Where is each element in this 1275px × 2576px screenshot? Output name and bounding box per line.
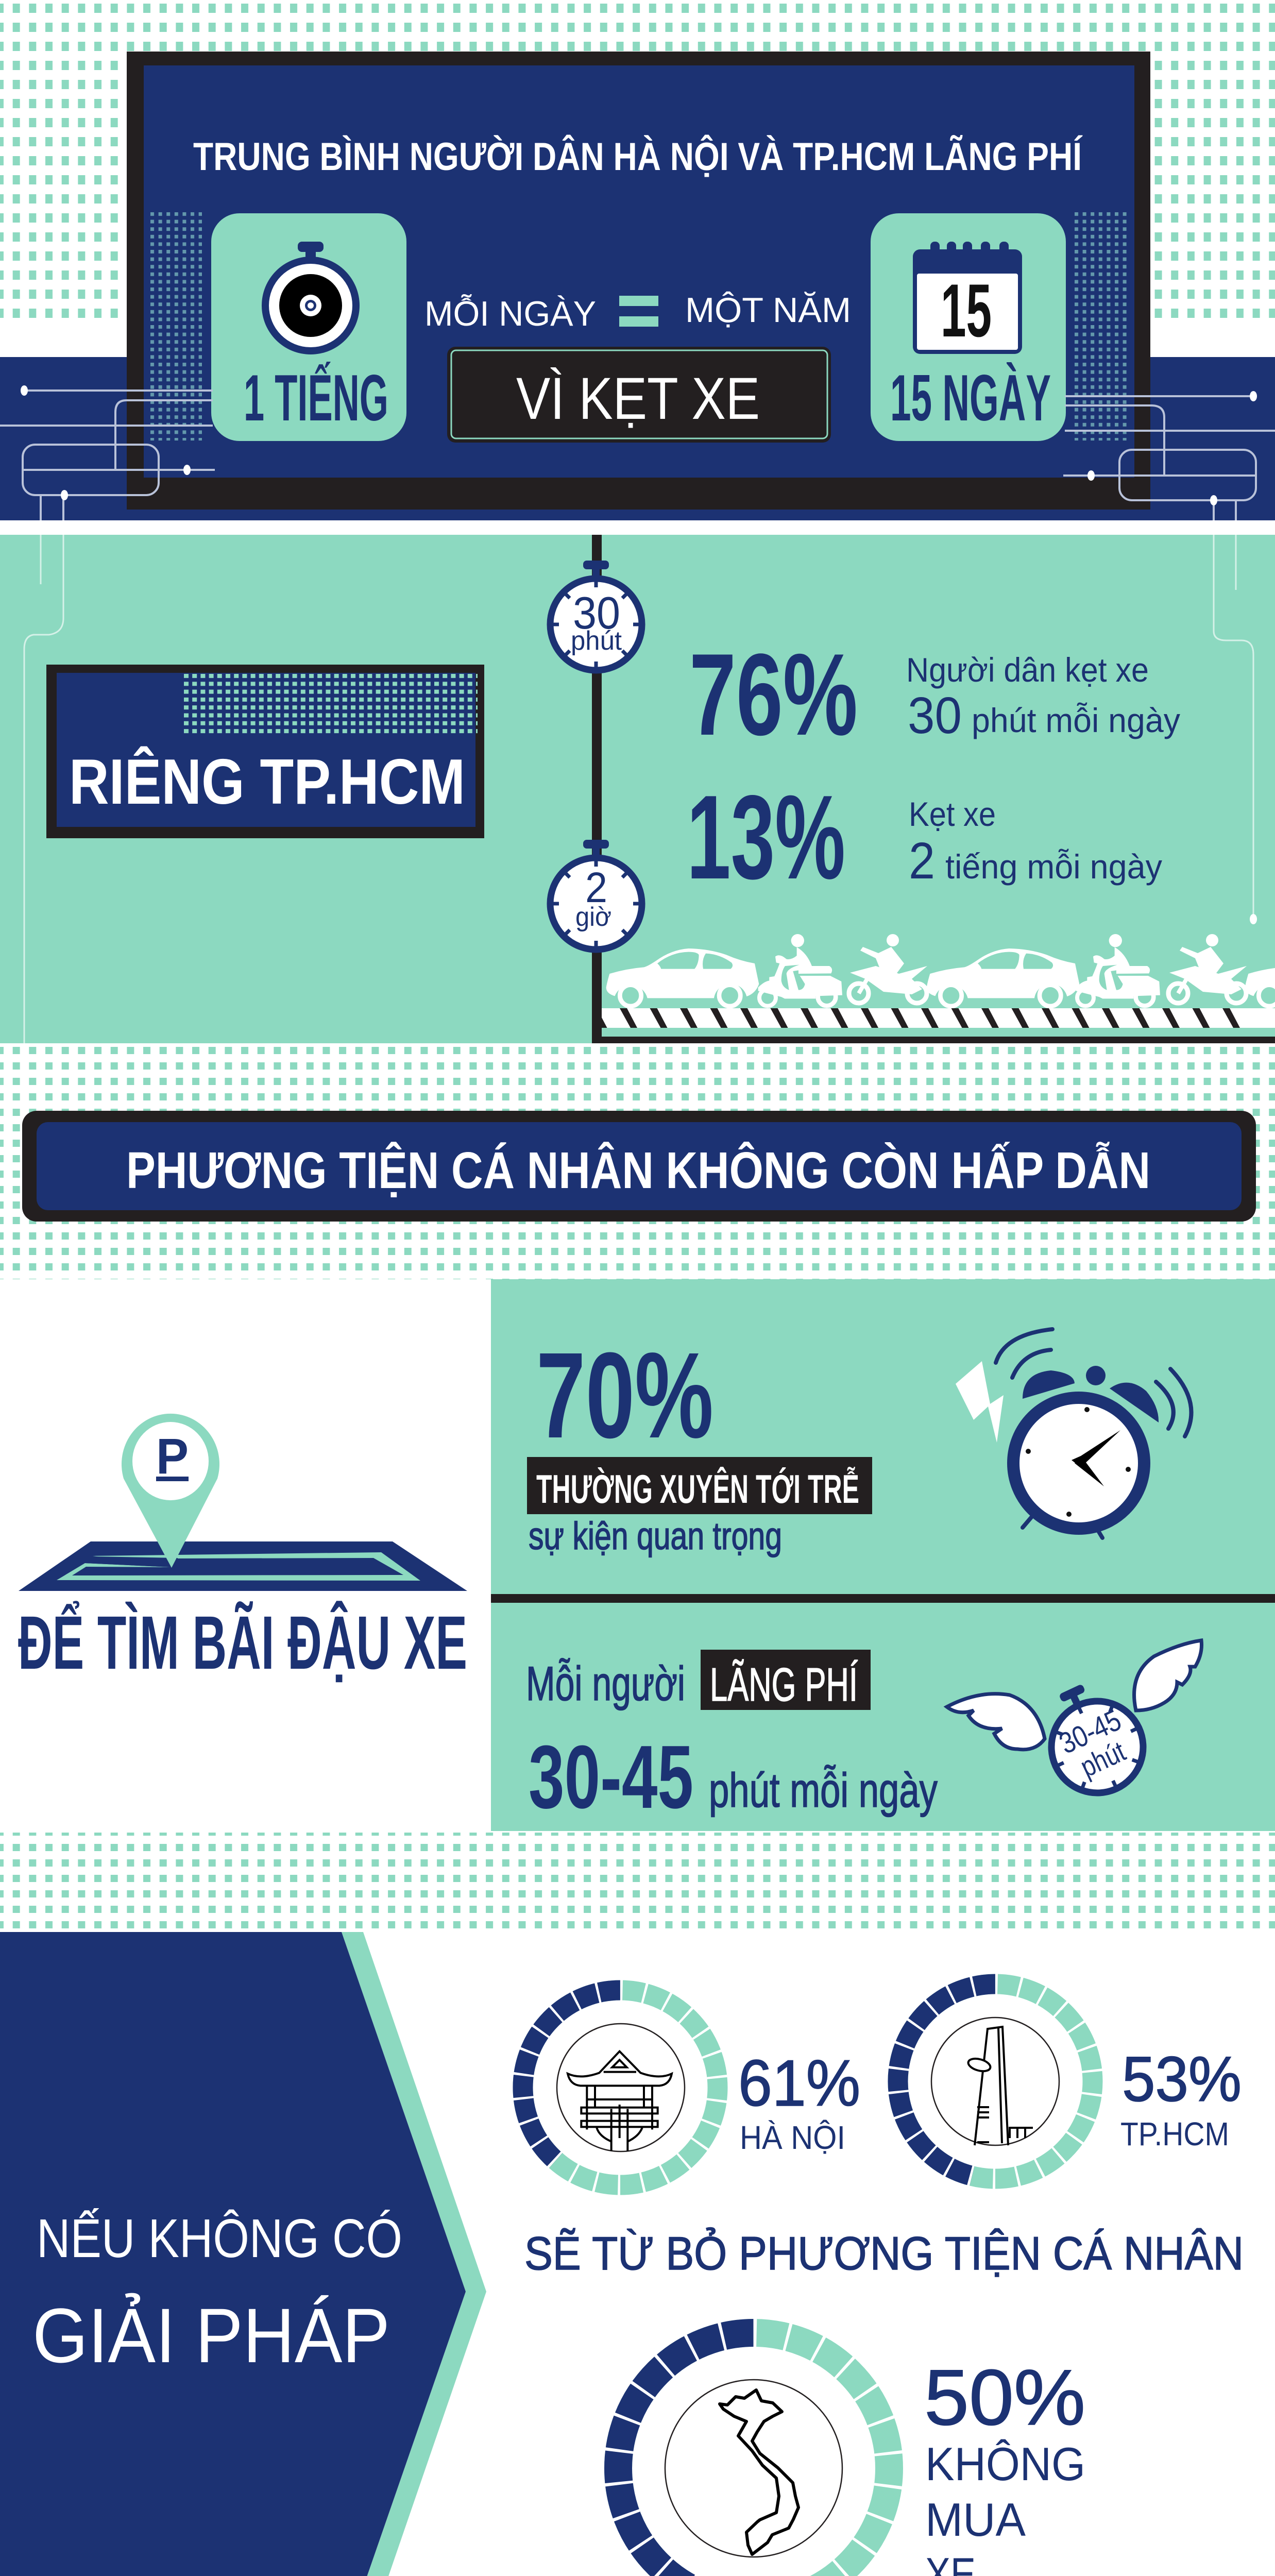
stat: not buying a car: KHÔNG <box>925 2438 1085 2490</box>
panel: parking search <box>0 1279 491 1831</box>
heading box: HCMC: RIÊNG TP.HCM <box>69 746 465 818</box>
stat: 13%: 13% <box>687 771 845 904</box>
callout: traffic jam: VÌ KẸT XE <box>516 366 760 432</box>
icon: stopwatch 30 minutes: 30 <box>573 587 620 638</box>
callout: traffic jam <box>447 347 831 443</box>
dots left <box>150 212 202 440</box>
circuit lines: right <box>1063 391 1275 520</box>
timeline line <box>592 535 602 1043</box>
label: 15 days: 15 NGÀY <box>890 361 1051 434</box>
text: every day: MỖI NGÀY <box>424 294 596 333</box>
text: important events: sự kiện quan trọng <box>529 1514 782 1557</box>
circuit dot <box>1250 914 1257 924</box>
panel: without solutions <box>0 1932 486 2576</box>
chevron: navy <box>0 1932 466 2576</box>
ring chart: HCMC 53% <box>877 1963 1113 2199</box>
stat: 13%: Kẹt xe <box>909 795 996 833</box>
number: 15: 15 <box>941 268 992 352</box>
heading box: HCMC <box>46 665 484 838</box>
stat: HCMC <box>1120 2044 1242 2153</box>
stat: not buying a car: MUA <box>925 2494 1026 2546</box>
icon: location pin: P <box>156 1428 189 1484</box>
icon: one pillar pagoda <box>568 2052 672 2151</box>
text: to find parking: ĐỂ TÌM BÃI ĐẬU XE <box>18 1601 467 1685</box>
label: waste <box>701 1650 871 1711</box>
dots right <box>1074 212 1130 440</box>
stat: 13%: 2 <box>909 832 935 890</box>
panel: headline screen <box>127 52 1150 510</box>
circuit lines: mint right <box>1214 535 1253 919</box>
screen inner <box>144 65 1134 478</box>
card: 1 hour <box>211 213 406 441</box>
ring chart: Vietnam 50% <box>618 2333 889 2576</box>
stat: HCMC: TP.HCM <box>1120 2115 1229 2153</box>
road <box>592 1008 1275 1043</box>
stat: 76%: 30 <box>908 687 962 744</box>
label: 1 hour: 1 TIẾNG <box>244 361 388 434</box>
icon: stopwatch 2 hours: giờ <box>575 902 611 932</box>
icon: equals sign <box>619 296 658 327</box>
icon: alarm clock <box>956 1329 1191 1538</box>
navy band: behind screen <box>0 357 1275 520</box>
stat: 13% <box>687 771 1162 904</box>
icon: flying stopwatch: 30-45 <box>1054 1703 1126 1760</box>
stat: Hanoi: 61% <box>738 2046 860 2120</box>
label: frequently late: THƯỜNG XUYÊN TỚI TRỄ <box>536 1466 859 1512</box>
icon: parking map <box>19 1541 467 1591</box>
text: solution: GIẢI PHÁP <box>32 2292 390 2379</box>
text: one year: MỘT NĂM <box>685 291 851 330</box>
icon: location pin <box>122 1414 219 1568</box>
stat: 30-45 minutes: 30-45 <box>529 1726 693 1827</box>
panel: late stats <box>491 1279 1275 1831</box>
icon: flying stopwatch <box>947 1640 1201 1808</box>
stat: 76%: Người dân kẹt xe <box>906 651 1149 689</box>
icon: stopwatch <box>262 242 360 354</box>
heading: private vehicles <box>22 1111 1256 1222</box>
stat: 13%: tiếng mỗi ngày <box>945 848 1162 886</box>
heading: screen title: TRUNG BÌNH NGƯỜI DÂN HÀ NỘI VÀ TP.HCM LÃNG PHÍ <box>193 134 1083 179</box>
stat: not buying a car: 50% <box>924 2353 1085 2442</box>
circuit lines: mint left <box>24 535 63 1043</box>
screen frame <box>127 52 1150 510</box>
panel: Ho Chi Minh City <box>0 535 1275 1043</box>
dot pattern: top background <box>0 0 1275 319</box>
icon: flying stopwatch: phút <box>1076 1735 1130 1783</box>
chevron: mint edge <box>342 1932 486 2576</box>
ring chart: Hanoi 61% <box>483 1950 758 2225</box>
divider <box>491 1594 1275 1603</box>
illustration: traffic <box>606 934 1275 1006</box>
stat: 30-45 minutes <box>529 1726 938 1827</box>
stat: Hanoi: HÀ NỘI <box>740 2119 845 2156</box>
dot pattern: mid background <box>0 1833 1275 1930</box>
stat: 76% <box>689 629 1180 759</box>
icon: stopwatch 2 hours: 2 <box>585 863 607 911</box>
icon: Vietnam map <box>720 2390 798 2554</box>
label: waste: LÃNG PHÍ <box>710 1659 858 1711</box>
icon: Bitexco tower <box>967 2027 1033 2145</box>
stat: 76%: 76% <box>689 629 858 759</box>
text: each person: Mỗi người <box>526 1656 685 1710</box>
card: 15 days <box>871 213 1066 441</box>
dot pattern: section heading background <box>0 1045 1275 1279</box>
icon: stopwatch 2 hours <box>550 840 642 950</box>
circuit lines: left <box>0 385 215 520</box>
stat: HCMC: 53% <box>1122 2044 1242 2115</box>
stat: Hanoi <box>738 2046 860 2156</box>
text: if no: NẾU KHÔNG CÓ <box>37 2208 402 2269</box>
stat: 30-45 minutes: phút mỗi ngày <box>709 1763 938 1817</box>
label: frequently late <box>527 1457 872 1514</box>
icon: calendar <box>913 242 1022 354</box>
stat: 76%: phút mỗi ngày <box>972 701 1180 739</box>
icon: stopwatch 30 minutes: phút <box>571 626 622 656</box>
stat: 70%: 70% <box>536 1327 713 1464</box>
icon: stopwatch 30 minutes <box>550 561 642 670</box>
stat: not buying a car <box>924 2353 1085 2576</box>
